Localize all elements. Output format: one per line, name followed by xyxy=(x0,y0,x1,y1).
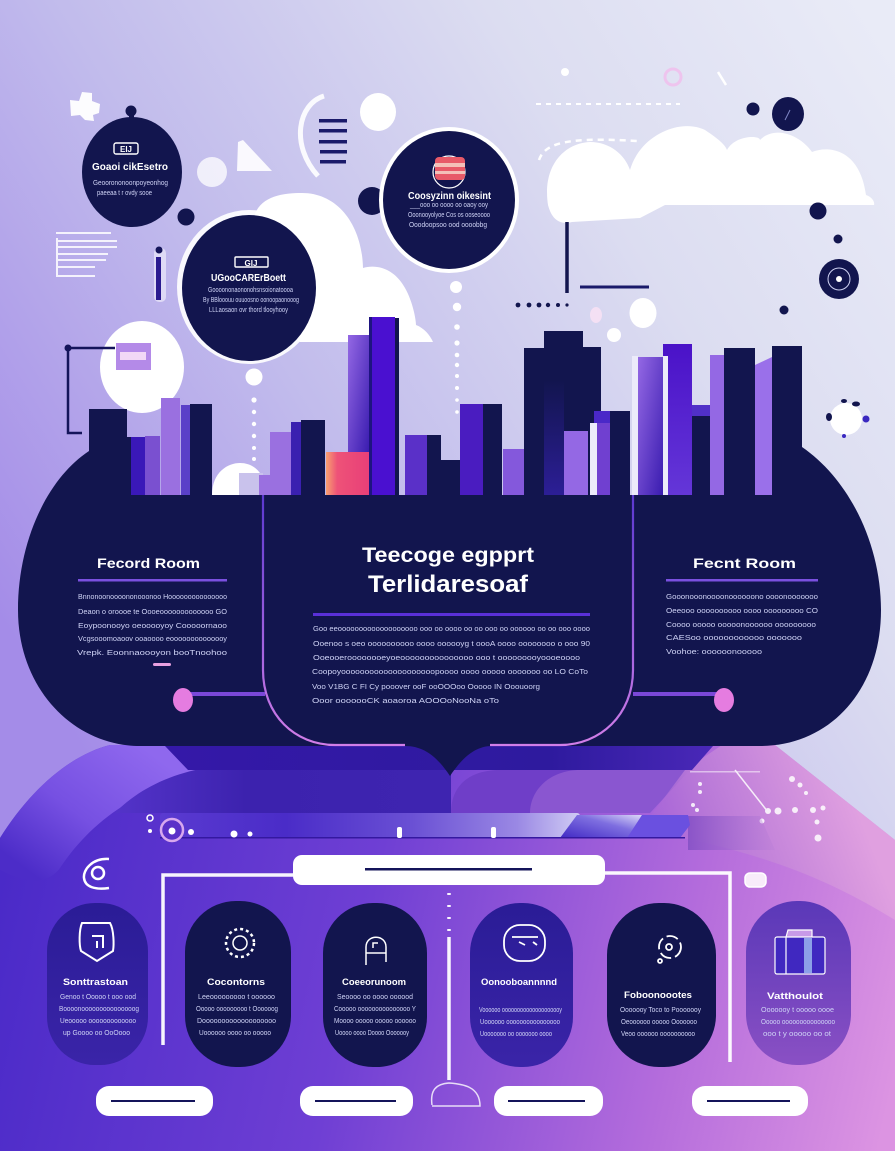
left text block xyxy=(77,555,228,666)
left text block: Eoypoonooyo oeooooyoy Cooooornaoo xyxy=(78,623,227,630)
capsule 3 xyxy=(323,903,427,1067)
heading: Cocontorns xyxy=(207,977,265,987)
icon: dotted ring xyxy=(226,929,254,957)
icon: swirl xyxy=(147,815,183,841)
body text: Geoorononoonpoyeonhog xyxy=(93,180,168,187)
circle: centre top xyxy=(358,127,519,273)
capsule 2 xyxy=(185,901,291,1067)
icon: folder xyxy=(116,343,151,370)
swirl icon left xyxy=(84,859,109,889)
body text: Goooononaononohsnsoionatoooa xyxy=(208,287,293,294)
circle: top-left: EIJ xyxy=(120,145,132,154)
strip dots xyxy=(188,827,496,838)
list lines xyxy=(319,119,347,164)
icon: letter A xyxy=(366,937,386,965)
right text block: Coooo ooooo ooooonoooooo ooooooooo xyxy=(666,622,816,629)
decorations top right xyxy=(516,68,870,438)
centre panel outline xyxy=(263,495,633,745)
body text: Seoooo oo oooo oooood xyxy=(337,994,413,1001)
centre text block: Coopoyoooooooooooooooooooopoooo oooo ooooo ooooooo oo LO CoTo xyxy=(312,669,588,676)
capsule 5: Veoo oooooo oooooooooo xyxy=(621,1031,695,1038)
heading: Coosyzinn oikesint xyxy=(408,191,492,202)
circle: middle left: By BBlooouu ouuoosno oonoopaonooog xyxy=(203,297,299,304)
capsule 1 xyxy=(47,903,148,1065)
white circle with folder icon xyxy=(64,321,184,433)
heading: Sonttrastoan xyxy=(63,977,128,987)
capsule 6 xyxy=(746,901,851,1065)
icon: puzzle piece xyxy=(70,92,100,121)
decorative cluster top left xyxy=(56,92,396,302)
cloud behind middle circle xyxy=(250,193,433,342)
right text block: Oeeooo oooooooooo oooo ooooooooo CO xyxy=(666,608,819,615)
row of dots xyxy=(516,303,569,307)
left pink connector xyxy=(173,688,265,712)
title: Teecoge egpprt xyxy=(362,544,534,567)
centre text block: Ooenoo s oeo oooooooooo oooo oooooyg t oooA oooo oooooooo o ooo 90 xyxy=(313,641,590,648)
left text block: Vcgsooomoaoov ooaoooo eoooooooooooooy xyxy=(78,636,228,643)
connector xyxy=(68,348,115,433)
centre text block: Voo V1BG C FI Cy pooover ooF ooOOOoo Ooooo IN Ooouoorg xyxy=(312,684,540,691)
body text: Gooonooonoooonoooooono oooonooooooo xyxy=(666,594,818,601)
icon: face xyxy=(504,925,545,961)
heading: Fecord Room xyxy=(97,555,200,571)
main navy panel xyxy=(18,447,881,776)
text: paeeaa t r ovdy sooe xyxy=(97,190,152,197)
circle: centre top: Ooonooyolyoe Cos os ooseoooo xyxy=(408,212,490,219)
centre text block: Ooor ooooooCK aoaoroa AOOOoNooNa oTo xyxy=(312,698,499,705)
left text block: Vrepk. Eoonnaoooyon booTnoohoo xyxy=(77,650,227,657)
dotted line xyxy=(536,103,680,105)
icon: triangle xyxy=(237,140,272,171)
icon: badge xyxy=(114,143,138,154)
right text block xyxy=(666,555,819,656)
icon: globe blob xyxy=(197,157,227,187)
icon: badge xyxy=(235,257,268,267)
icon: gear xyxy=(819,259,859,299)
body text: Bnnonoonoooononooonoo Hooooooooooooooo xyxy=(78,594,227,601)
centre text block: Ooeooeroooooooeyoeooooooooooooooo ooo t ooooooooyoooeoooo xyxy=(313,655,580,662)
body text: Ooooooy Toco to Pooooooy xyxy=(620,1007,701,1014)
icon: striped box xyxy=(433,156,465,188)
right text block: Voohoe: oooooonooooo xyxy=(666,649,762,656)
icon: shield xyxy=(80,923,114,961)
heading: Oonooboannnnd xyxy=(481,977,557,987)
capsule 6: Ooooo ooooooooooooooo xyxy=(761,1019,835,1026)
small tag icon right xyxy=(745,873,766,887)
body text: Genoo t Ooooo t ooo ood xyxy=(60,994,136,1001)
connector dots xyxy=(246,281,462,461)
pill 4 xyxy=(692,1086,808,1116)
capsule 2: Ooooo ooooooooo t Oooooog xyxy=(196,1006,278,1013)
capsule 1: Ueooooo ooooooooooooo xyxy=(60,1018,136,1025)
body text: Leeooooooooo t oooooo xyxy=(198,994,275,1001)
icon: dotted ring xyxy=(826,399,870,438)
dashed arc xyxy=(539,140,637,160)
body text: Ooooooy t ooooo oooe xyxy=(761,1007,834,1014)
capsule 1: Boooonooooooooooooooog xyxy=(59,1006,139,1013)
capsule 5: Oeoooooo ooooo Ooooooo xyxy=(621,1019,697,1026)
icon: gear arc xyxy=(300,96,324,176)
heading: Foboonoootes xyxy=(624,990,692,1000)
lower purple mound xyxy=(0,745,895,1151)
gradient strip xyxy=(147,813,775,850)
centre text block: Terlidaresoaf xyxy=(368,571,529,598)
navy dot xyxy=(178,208,194,226)
capsule 3: Cooooo ooooooooooooooo Y xyxy=(334,1006,416,1013)
pill 3 xyxy=(494,1086,603,1116)
body text: Goo eeooooooooooooooooooo ooo oo oooo oo oo ooo oo oooooo oo oo ooo oooo xyxy=(313,626,590,633)
capsule 3: Uoooo oooo Doooo Ooooooy xyxy=(335,1030,409,1037)
capsule 4 xyxy=(470,903,573,1067)
heading: UGooCARErBoett xyxy=(211,273,287,284)
top pill xyxy=(293,855,605,885)
body text: Voooooo oooooooooooooooooooy xyxy=(479,1007,562,1014)
capsule 2: Uoooooo oooo oo ooooo xyxy=(199,1030,271,1037)
heading: Coeeorunoom xyxy=(342,977,406,987)
white line list xyxy=(56,232,117,277)
capsule 4: Uoooooo oooooooooooooooo xyxy=(480,1019,560,1026)
right pink connector xyxy=(633,688,734,712)
pink dash xyxy=(153,663,171,666)
cloud upper right xyxy=(547,126,874,223)
body text: ___ooo oo oooo oo oaoy ooy xyxy=(409,202,488,209)
connector lines xyxy=(163,873,730,1106)
capsule 3: Moooo ooooo ooooo oooooo xyxy=(334,1018,416,1025)
heading: Fecnt Room xyxy=(693,555,796,571)
accent rule xyxy=(313,613,590,616)
capsule 2: Dooooooooooooooooooo xyxy=(197,1018,276,1025)
heading: Goaoi cikEsetro xyxy=(92,162,168,173)
white bubbles xyxy=(630,298,656,328)
i mark xyxy=(154,246,166,302)
icon: target xyxy=(658,936,681,963)
L bracket xyxy=(565,222,569,293)
circle: middle left: GIJ xyxy=(245,259,257,268)
accent rule xyxy=(666,579,818,582)
right text block: CAESoo oooooooooooo ooooooo xyxy=(666,635,802,642)
left text block: Deaon o oroooe te Oooeooooooooooooo GO xyxy=(78,609,228,616)
white blob xyxy=(360,93,396,131)
navy dots xyxy=(746,102,760,116)
circle: top-left xyxy=(82,106,182,227)
accent rule xyxy=(78,579,227,582)
icon: briefcase xyxy=(775,930,825,974)
icon: pink ring xyxy=(665,69,681,85)
centre text block xyxy=(312,544,590,705)
bottom pills xyxy=(96,1086,808,1116)
capsule 6: ooo t y ooooo oo ot xyxy=(763,1031,831,1038)
decorative constellation right xyxy=(690,770,826,842)
pill 1 xyxy=(96,1086,213,1116)
circle: middle left: LLLaosaon ovr thord tlooyhooy xyxy=(209,307,288,314)
circle: middle left xyxy=(177,210,321,364)
capsule 1: up Goooo oo OoOooo xyxy=(63,1030,130,1037)
pill 2 xyxy=(300,1086,413,1116)
capsule 4: Uooooooo oo ooooooo oooo xyxy=(480,1031,552,1038)
circle: centre top: Ooodoopsoo ood oooobbg xyxy=(409,222,487,229)
capsule 5 xyxy=(607,903,716,1067)
bar chart skyline xyxy=(89,317,802,495)
heading: Vatthoulot xyxy=(767,991,823,1001)
